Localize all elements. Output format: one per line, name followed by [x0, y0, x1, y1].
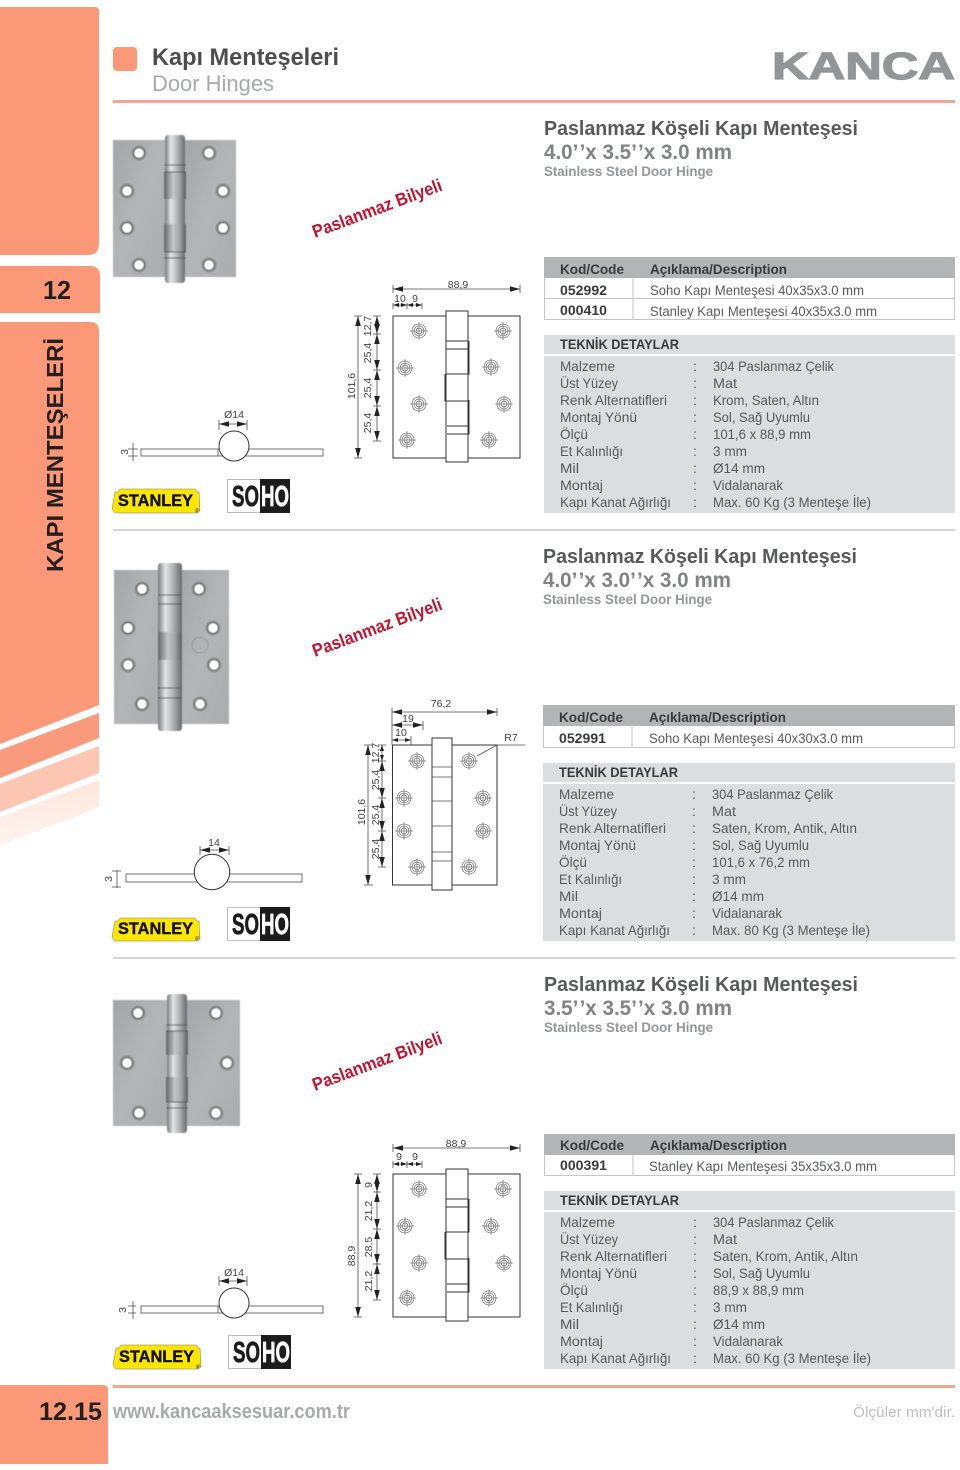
- product 3 side view: [117, 1267, 323, 1319]
- product 2 side view: 3: [103, 876, 115, 882]
- product 1 technical details: :: [693, 460, 697, 476]
- product 2 technical details: Ø14 mm: [712, 888, 764, 904]
- product 3 code table: Stanley Kapı Menteşesi 35x35x3.0 mm: [649, 1158, 877, 1174]
- header icon: [113, 47, 137, 71]
- sidebar: chapter number tab: [0, 266, 100, 313]
- product 1 heading: 4.0’’x 3.5’’x 3.0 mm: [544, 141, 732, 164]
- product 2 heading: Stainless Steel Door Hinge: [543, 592, 712, 607]
- footer page number tab: [0, 1385, 108, 1464]
- product 1 technical drawing: 101,6: [346, 373, 358, 399]
- product 3 technical details: TEKNİK DETAYLAR: [560, 1192, 679, 1208]
- product 2 Stanley logo: [112, 918, 200, 943]
- product 2 technical details: Saten, Krom, Antik, Altın: [712, 820, 857, 836]
- product 2 technical details: TEKNİK DETAYLAR: [559, 764, 678, 780]
- product 3 technical details: :: [693, 1265, 697, 1281]
- product 2 technical details: Sol, Sağ Uyumlu: [712, 837, 809, 853]
- product 1 code table: Açıklama/Description: [650, 261, 787, 277]
- product 3 heading: 3.5’’x 3.5’’x 3.0 mm: [544, 997, 732, 1020]
- product 3 technical details: Mil: [560, 1316, 579, 1332]
- product 3 technical details: Et Kalınlığı: [560, 1299, 623, 1315]
- product 2 technical details: :: [692, 905, 696, 921]
- product 1 technical details: Renk Alternatifleri: [560, 392, 667, 408]
- product 2 badge: Paslanmaz Bilyeli: [309, 594, 445, 661]
- product 1 heading: Paslanmaz Köşeli Kapı Menteşesi: [544, 118, 858, 140]
- product 1 technical details: 101,6 x 88,9 mm: [713, 426, 811, 442]
- product 3 technical details: :: [693, 1214, 697, 1230]
- product 2 technical drawing: [356, 698, 525, 890]
- product 3 technical drawing: [346, 1138, 520, 1321]
- product 2 technical drawing: 12,7: [370, 743, 382, 763]
- product 3 technical details: Renk Alternatifleri: [560, 1248, 667, 1264]
- product 3 code table: [544, 1134, 955, 1176]
- product 3 technical details: :: [693, 1282, 697, 1298]
- product 3 technical details: Mat: [713, 1231, 737, 1247]
- footer page number tab: 12.15: [39, 1398, 102, 1426]
- product 1 Stanley logo: ®: [195, 508, 200, 515]
- product 2 technical details: Montaj: [559, 905, 602, 921]
- product 3 technical details: :: [693, 1231, 697, 1247]
- product 2 technical details: :: [692, 871, 696, 887]
- product 2 heading: Paslanmaz Köşeli Kapı Menteşesi: [543, 546, 857, 568]
- product 2 technical details: Et Kalınlığı: [559, 871, 622, 887]
- product 1 side view: 3: [119, 449, 131, 455]
- product 3 Soho logo: [228, 1335, 291, 1369]
- product 1 side view: [119, 409, 323, 461]
- product 1 technical drawing: 88,9: [448, 279, 468, 291]
- sidebar: section title panel: KAPI MENTEŞELERİ: [42, 338, 68, 572]
- product 3 technical drawing: 21,2: [363, 1201, 375, 1221]
- product 1 technical details: Ø14 mm: [713, 460, 765, 476]
- product 3 heading: [544, 974, 858, 1035]
- product 2 technical drawing: 76,2: [431, 698, 451, 710]
- product 1 technical drawing: [346, 279, 520, 462]
- product 3 Stanley logo: [113, 1345, 201, 1371]
- product 2 Soho logo: SO: [232, 909, 259, 941]
- product 2 technical details: Renk Alternatifleri: [559, 820, 666, 836]
- footer website: www.kancaaksesuar.com.tr: [112, 1401, 350, 1423]
- product 1 technical details: 3 mm: [713, 443, 747, 459]
- product 3 technical details: :: [693, 1350, 697, 1366]
- product 1 technical details: TEKNİK DETAYLAR: [560, 336, 679, 352]
- product 2 technical details: :: [692, 922, 696, 938]
- product 1 technical drawing: 12,7: [362, 316, 374, 336]
- product 3 technical details: :: [693, 1248, 697, 1264]
- product 1 technical drawing: 25,4: [362, 413, 374, 433]
- page title: Door Hinges: [152, 71, 274, 96]
- product 3 technical details: Ø14 mm: [713, 1316, 765, 1332]
- product 2 technical details: Ölçü: [559, 853, 587, 870]
- product 3 technical details: Ölçü: [560, 1281, 588, 1298]
- product 2 technical details: Üst Yüzey: [559, 802, 617, 819]
- product 1 Soho logo: SO: [232, 481, 259, 513]
- product 1 photo: hinge: [113, 135, 236, 283]
- product 1 technical details: Montaj Yönü: [560, 409, 637, 425]
- product 3 technical details: 304 Paslanmaz Çelik: [713, 1214, 835, 1230]
- product 2 side view: [103, 837, 302, 890]
- product 1 technical details: Sol, Sağ Uyumlu: [713, 409, 810, 425]
- product 3 technical drawing: 9: [363, 1182, 375, 1188]
- product 1 technical details: Max. 60 Kg (3 Menteşe İle): [713, 493, 871, 510]
- product 1 Stanley logo: STANLEY: [118, 491, 194, 510]
- product 1 technical details: 304 Paslanmaz Çelik: [713, 358, 835, 374]
- product 2 photo: hinge: [114, 563, 229, 731]
- product 1 technical details: :: [693, 392, 697, 408]
- product 3 heading: Paslanmaz Köşeli Kapı Menteşesi: [544, 974, 858, 996]
- product 1 technical details: Kapı Kanat Ağırlığı: [560, 494, 671, 510]
- product 2 technical details: 101,6 x 76,2 mm: [712, 854, 810, 870]
- product 3 technical details: 3 mm: [713, 1299, 747, 1315]
- product 3 technical details: [544, 1191, 955, 1369]
- product 3 Soho logo: HO: [262, 1337, 290, 1369]
- product 2 code table: Soho Kapı Menteşesi 40x30x3.0 mm: [649, 730, 863, 746]
- product 2 technical details: Mil: [559, 888, 578, 904]
- product 3 technical details: Saten, Krom, Antik, Altın: [713, 1248, 858, 1264]
- sidebar: chapter number tab: 12: [43, 275, 71, 305]
- product 1 side view: Ø14: [224, 409, 244, 421]
- product 1 code table: Stanley Kapı Menteşesi 40x35x3.0 mm: [650, 303, 877, 319]
- product 3 technical details: Malzeme: [560, 1214, 615, 1230]
- product 2 technical drawing: 10: [395, 727, 407, 739]
- product 2 technical details: Montaj Yönü: [559, 837, 636, 853]
- product 3 technical details: Üst Yüzey: [560, 1230, 618, 1247]
- product 3 code table: Kod/Code: [560, 1137, 624, 1153]
- product 2 code table: Açıklama/Description: [649, 709, 786, 725]
- product 2 technical drawing: 25,4: [370, 805, 382, 825]
- product 1 technical details: Malzeme: [560, 358, 615, 374]
- product 3 technical drawing: 28,5: [363, 1237, 375, 1257]
- product 3 Stanley logo: STANLEY: [119, 1347, 195, 1366]
- product 2 technical details: [543, 763, 955, 941]
- product 2 technical drawing: 25,4: [370, 770, 382, 790]
- product 1 technical details: :: [693, 409, 697, 425]
- product 1 heading: Stainless Steel Door Hinge: [544, 164, 713, 179]
- product 2 technical details: Mat: [712, 803, 736, 819]
- product 2 technical details: Vidalanarak: [712, 905, 783, 921]
- product 3 technical details: Kapı Kanat Ağırlığı: [560, 1350, 671, 1366]
- product 3 side view: 3: [117, 1307, 129, 1313]
- sidebar: section title panel: [0, 322, 99, 744]
- page title: [152, 44, 339, 96]
- sidebar: top tab: [0, 7, 99, 255]
- product 1 technical drawing: 10: [394, 293, 406, 305]
- product 2 technical details: :: [692, 820, 696, 836]
- product 2 technical drawing: 19: [402, 713, 414, 725]
- product 2 heading: 4.0’’x 3.0’’x 3.0 mm: [543, 569, 731, 592]
- product 2 technical drawing: 25,4: [370, 839, 382, 859]
- product 1 technical details: Mat: [713, 375, 737, 391]
- product 2 technical details: Max. 80 Kg (3 Menteşe İle): [712, 921, 870, 938]
- product 3 technical details: Max. 60 Kg (3 Menteşe İle): [713, 1349, 871, 1366]
- product 1 code table: 052992: [560, 282, 607, 298]
- product 2 technical details: :: [692, 786, 696, 802]
- product 2 technical details: 3 mm: [712, 871, 746, 887]
- product 1 technical drawing: 25,4: [362, 378, 374, 398]
- product 1 technical details: :: [693, 494, 697, 510]
- product 1 code table: Kod/Code: [560, 261, 624, 277]
- product 2 code table: [543, 705, 955, 748]
- product 2 technical details: 304 Paslanmaz Çelik: [712, 786, 834, 802]
- product 1 technical details: :: [693, 375, 697, 391]
- sidebar: fading diagonal strips: [0, 713, 99, 845]
- product 3 badge: Paslanmaz Bilyeli: [309, 1028, 445, 1095]
- product 2 technical details: Malzeme: [559, 786, 614, 802]
- product 2 side view: 14: [208, 837, 220, 849]
- product 3 side view: Ø14: [224, 1267, 244, 1279]
- product 3 technical details: Sol, Sağ Uyumlu: [713, 1265, 810, 1281]
- product 1 technical details: :: [693, 358, 697, 374]
- product 2 Stanley logo: STANLEY: [118, 919, 194, 938]
- product 2 technical details: Kapı Kanat Ağırlığı: [559, 922, 670, 938]
- product 3 technical drawing: 21,2: [363, 1271, 375, 1291]
- product 1 code table: 000410: [560, 302, 607, 318]
- product 1 badge: Paslanmaz Bilyeli: [309, 175, 445, 242]
- product 2 technical drawing: 101,6: [356, 799, 368, 825]
- product 3 technical details: 88,9 x 88,9 mm: [713, 1282, 804, 1298]
- product 1 heading: [544, 118, 858, 179]
- footer note: Ölçüler mm'dir.: [853, 1403, 955, 1421]
- product 1 technical details: Krom, Saten, Altın: [713, 392, 819, 408]
- product 3 technical drawing: 9: [412, 1151, 418, 1163]
- product 1 Soho logo: [228, 479, 290, 513]
- product 1 technical drawing: 9: [412, 293, 418, 305]
- product 2 code table: 052991: [559, 730, 606, 746]
- product 1 technical details: Mil: [560, 460, 579, 476]
- product 3 technical drawing: 88,9: [346, 1246, 358, 1266]
- product 1 code table: [544, 257, 955, 320]
- product 1 technical details: Ölçü: [560, 425, 588, 442]
- product 3 Stanley logo: ®: [196, 1364, 201, 1371]
- product 2 code table: Kod/Code: [559, 709, 623, 725]
- product 1 technical details: [544, 335, 955, 513]
- product 2 Stanley logo: ®: [195, 936, 200, 943]
- product 3 technical drawing: 9: [396, 1151, 402, 1163]
- product 3 Soho logo: SO: [233, 1337, 260, 1369]
- KANCA logo: KANCA: [772, 46, 955, 88]
- product 1 Soho logo: HO: [261, 481, 289, 513]
- product 2 technical details: :: [692, 854, 696, 870]
- product 3 photo: hinge: [113, 994, 240, 1133]
- product 3 technical details: Montaj Yönü: [560, 1265, 637, 1281]
- product 2 technical details: :: [692, 888, 696, 904]
- product 3 technical details: Montaj: [560, 1333, 603, 1349]
- product 1 Stanley logo: [112, 489, 200, 515]
- product 3 technical details: :: [693, 1316, 697, 1332]
- product 3 technical drawing: 88,9: [446, 1138, 466, 1150]
- product 1 code table: Soho Kapı Menteşesi 40x35x3.0 mm: [650, 282, 864, 298]
- product 1 technical drawing: 25,4: [362, 343, 374, 363]
- product 3 technical details: :: [693, 1299, 697, 1315]
- product 2 technical details: :: [692, 837, 696, 853]
- product 1 technical details: Montaj: [560, 477, 603, 493]
- product 2 heading: [543, 546, 857, 607]
- page title: Kapı Menteşeleri: [152, 44, 339, 71]
- product 2 Soho logo: [228, 907, 290, 941]
- product 1 technical details: Üst Yüzey: [560, 374, 618, 391]
- product 2 technical details: :: [692, 803, 696, 819]
- product 3 code table: Açıklama/Description: [650, 1137, 787, 1153]
- product 1 technical details: :: [693, 477, 697, 493]
- product 2 Soho logo: HO: [261, 909, 289, 941]
- product 3 technical details: Vidalanarak: [713, 1333, 784, 1349]
- product 2 technical drawing: R7: [504, 732, 518, 744]
- product 1 technical details: :: [693, 426, 697, 442]
- product 3 code table: 000391: [560, 1157, 607, 1173]
- product 3 heading: Stainless Steel Door Hinge: [544, 1020, 713, 1035]
- product 1 technical details: Et Kalınlığı: [560, 443, 623, 459]
- product 3 technical details: :: [693, 1333, 697, 1349]
- product 1 technical details: :: [693, 443, 697, 459]
- product 1 technical details: Vidalanarak: [713, 477, 784, 493]
